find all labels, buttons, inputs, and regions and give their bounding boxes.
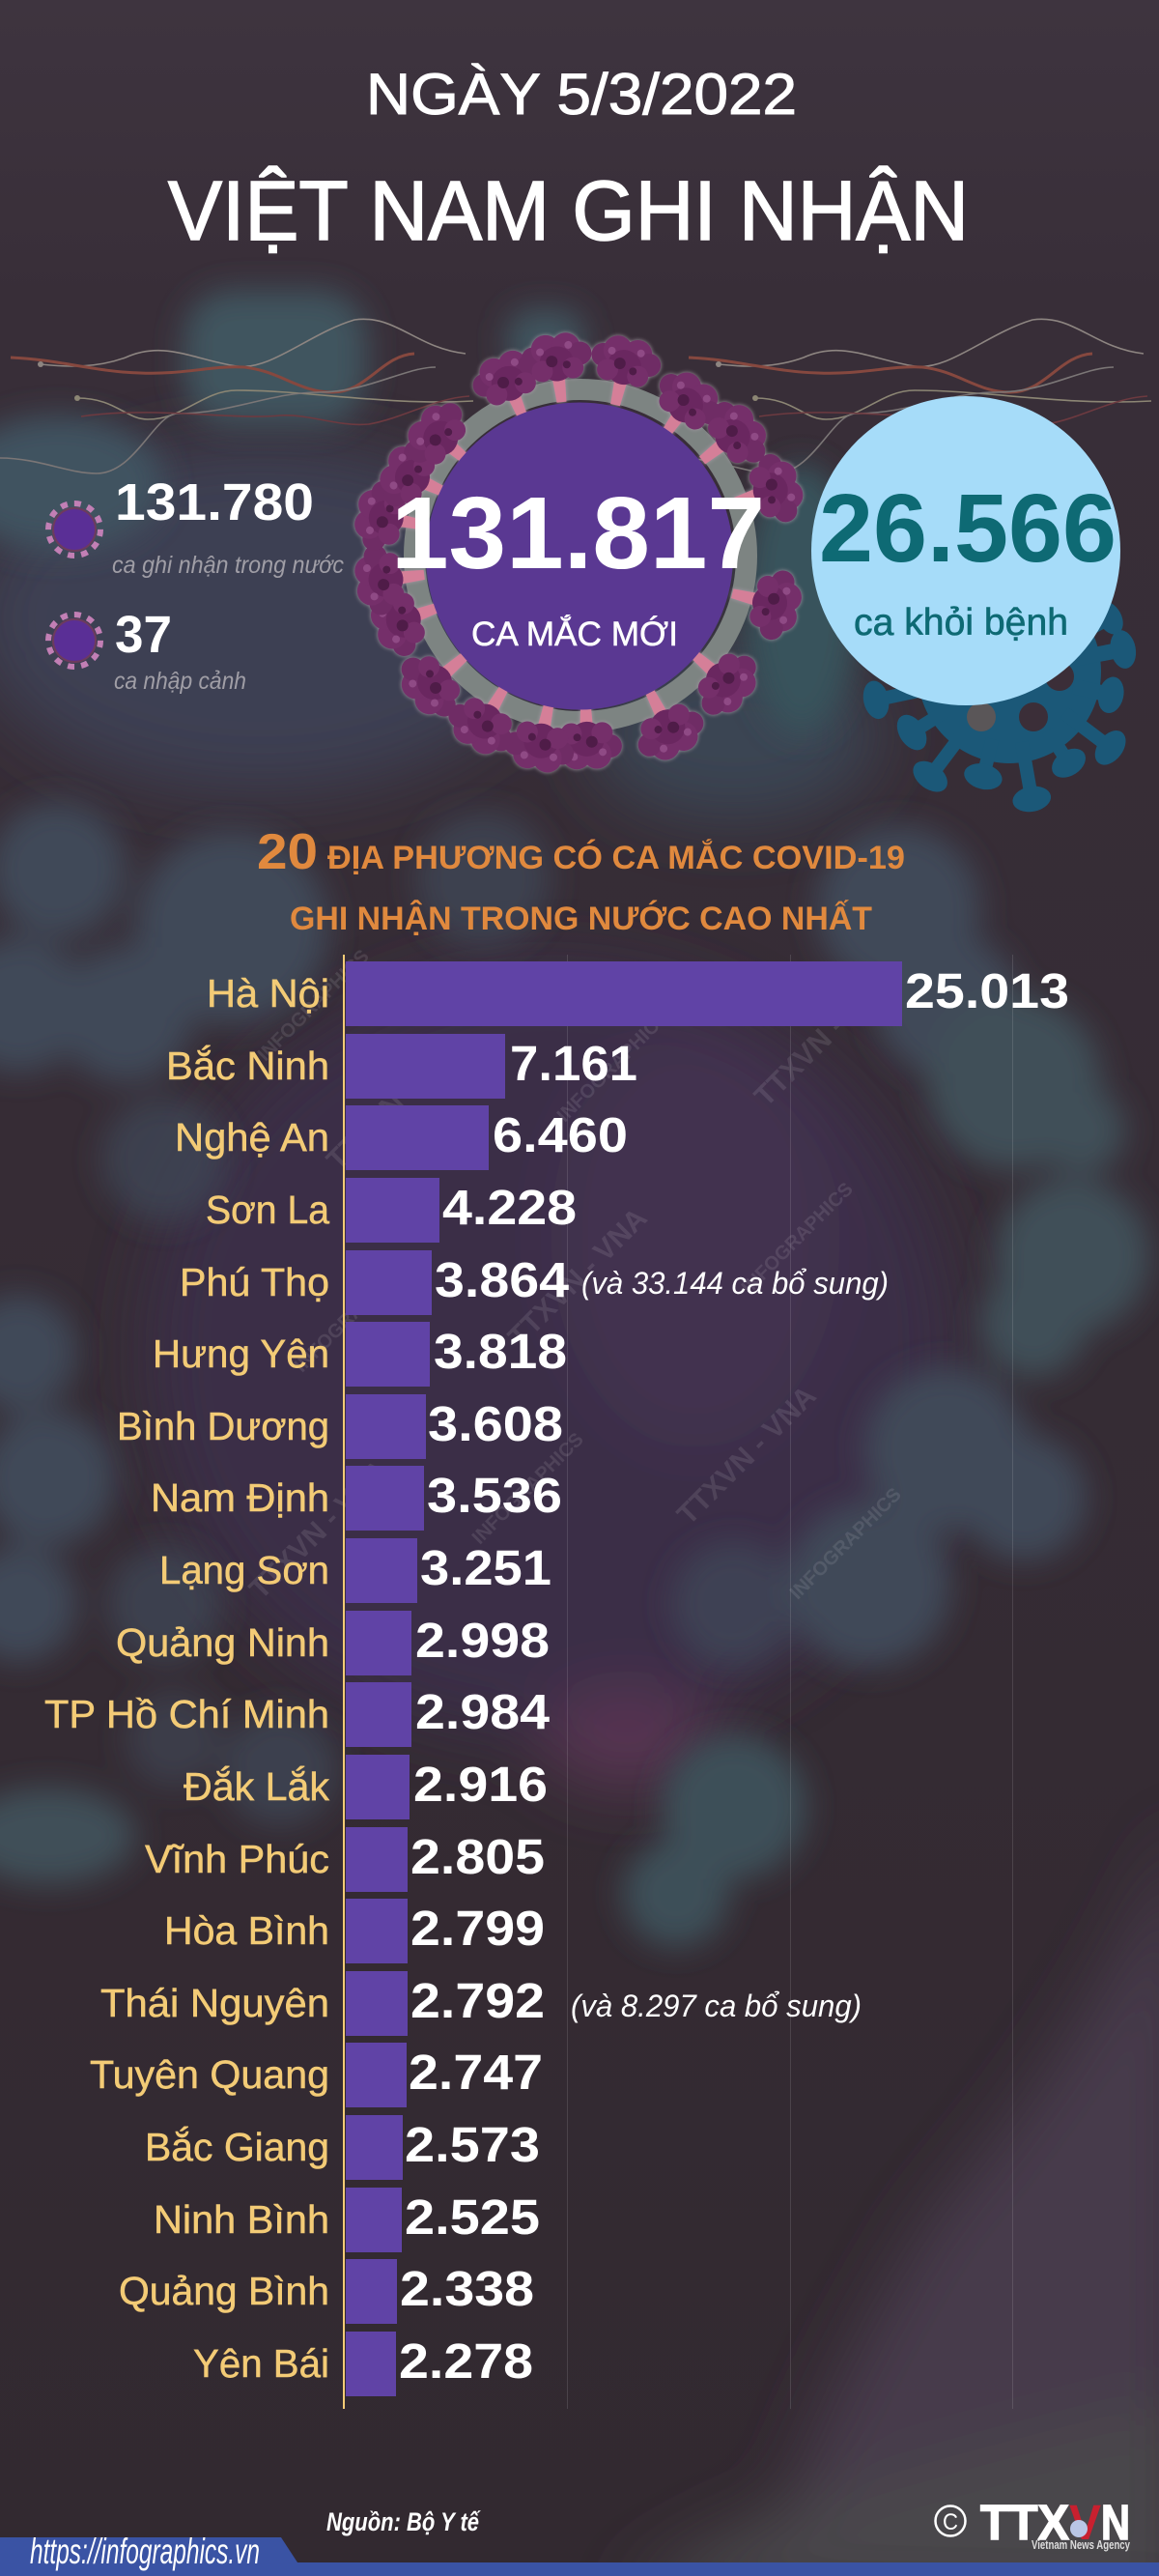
- row: Hòa Bình: [164, 1899, 545, 1963]
- row: Sơn La: Sơn La: [206, 1188, 329, 1232]
- row: Ninh Bình: Ninh Bình: [154, 2197, 329, 2242]
- row: TP Hồ Chí Minh: TP Hồ Chí Minh: [44, 1692, 329, 1736]
- row: Hà Nội: [207, 961, 1069, 1026]
- chart heading: 20: [257, 824, 318, 880]
- row: Sơn La: 4.228: [442, 1180, 577, 1235]
- row: Quảng Ninh: Quảng Ninh: [116, 1620, 329, 1665]
- imported number: 37: [115, 606, 172, 664]
- copyright mark: [935, 2506, 966, 2535]
- row: Nam Định: Nam Định: [151, 1475, 329, 1520]
- watermarks: TTXVN - VNA: [321, 1025, 472, 1177]
- row: Đắk Lắk: Đắk Lắk: [184, 1764, 329, 1809]
- row: Hưng Yên: [153, 1322, 567, 1387]
- row: Quảng Ninh: [116, 1611, 550, 1675]
- watermarks: [243, 946, 906, 1606]
- row: Hòa Bình: Hòa Bình: [164, 1908, 329, 1953]
- row: Yên Bái: 2.278: [399, 2333, 533, 2389]
- row: Ninh Bình: [154, 2188, 540, 2252]
- watermarks: INFOGRAPHICS: [468, 1429, 588, 1549]
- row: Bình Dương: [117, 1394, 563, 1459]
- row: Bắc Ninh: Bắc Ninh: [166, 1044, 329, 1088]
- title: main: VIỆT NAM GHI NHẬN: [168, 164, 969, 258]
- row: Hà Nội: 25.013: [905, 963, 1069, 1018]
- source note: Nguồn: Bộ Y tế: [326, 2507, 481, 2536]
- domestic number: 131.780: [115, 473, 314, 531]
- row: Lạng Sơn: 3.251: [420, 1540, 551, 1595]
- watermarks: TTXVN - VNA: [671, 1380, 823, 1531]
- row: Quảng Bình: Quảng Bình: [119, 2269, 329, 2313]
- row: Quảng Bình: 2.338: [400, 2261, 534, 2316]
- chart heading: GHI NHẬN TRONG NƯỚC CAO NHẤT: [290, 901, 872, 937]
- recovered number: 26.566: [819, 474, 1117, 583]
- row: Nghệ An: 6.460: [493, 1107, 628, 1162]
- row: Bình Dương: 3.608: [428, 1396, 563, 1451]
- panel: recovered circle: [811, 396, 1120, 705]
- row: Quảng Ninh: 2.998: [415, 1613, 550, 1668]
- watermarks: TTXVN - VNA: [749, 961, 900, 1113]
- imported label: ca nhập cảnh: [114, 668, 246, 695]
- row: Tuyên Quang: 2.747: [409, 2045, 543, 2100]
- chart heading: [257, 824, 905, 937]
- url: https://infographics.vn: [30, 2532, 260, 2571]
- row: Lạng Sơn: Lạng Sơn: [159, 1548, 329, 1592]
- row: Hòa Bình: 2.799: [410, 1901, 545, 1956]
- icon: small virus domestic: [48, 503, 100, 556]
- icon: blue virus behind recovered circle: [860, 580, 1139, 815]
- row: Bình Dương: Bình Dương: [117, 1404, 329, 1448]
- footer band with url: [0, 2532, 1159, 2576]
- row: Yên Bái: [193, 2332, 533, 2396]
- row: Vĩnh Phúc: 2.805: [410, 1829, 545, 1884]
- row: Thái Nguyên: 2.792: [410, 1973, 545, 2028]
- row: Nghệ An: [175, 1105, 628, 1170]
- row: Phú Thọ: (và 33.144 ca bổ sung): [581, 1266, 889, 1301]
- row: Tuyên Quang: [90, 2043, 543, 2107]
- row: Nghệ An: Nghệ An: [175, 1115, 329, 1159]
- row: Bắc Ninh: 7.161: [510, 1036, 637, 1091]
- row: Lạng Sơn: [159, 1538, 551, 1603]
- row: Bắc Ninh: [166, 1034, 637, 1099]
- row: Thái Nguyên: Thái Nguyên: [100, 1981, 329, 2025]
- row: Bắc Giang: Bắc Giang: [145, 2125, 329, 2169]
- row: Nam Định: [151, 1466, 562, 1531]
- watermarks: INFOGRAPHICS: [553, 1007, 673, 1127]
- row: Hưng Yên: Hưng Yên: [153, 1331, 329, 1376]
- wave lines left: [0, 319, 473, 473]
- row: Phú Thọ: 3.864: [435, 1252, 570, 1307]
- row: Thái Nguyên: [100, 1971, 862, 2036]
- new cases number: 131.817: [391, 476, 765, 590]
- panel: domestic cases: [48, 473, 344, 579]
- row: Vĩnh Phúc: Vĩnh Phúc: [145, 1837, 329, 1881]
- watermarks: INFOGRAPHICS: [254, 946, 374, 1066]
- row: Quảng Bình: [119, 2259, 534, 2324]
- watermarks: INFOGRAPHICS: [291, 1257, 410, 1377]
- row: Hà Nội: Hà Nội: [207, 971, 329, 1016]
- row: Phú Thọ: [180, 1250, 889, 1315]
- logo: TTXVN: TTX: [980, 2495, 1069, 2550]
- new cases label: CA MẮC MỚI: [471, 615, 678, 653]
- row: Bắc Giang: 2.573: [405, 2117, 540, 2172]
- row: Thái Nguyên: (và 8.297 ca bổ sung): [571, 1989, 862, 2023]
- chart heading: ĐỊA PHƯƠNG CÓ CA MẮC COVID-19: [327, 840, 905, 876]
- copyright mark: C: [943, 2509, 958, 2535]
- icon: large coronavirus: [350, 329, 810, 778]
- panel: imported cases: [48, 606, 246, 695]
- watermarks: INFOGRAPHICS: [738, 1179, 858, 1299]
- row: TP Hồ Chí Minh: 2.984: [415, 1684, 551, 1739]
- bar chart: [44, 955, 1069, 2409]
- row: Sơn La: [206, 1178, 577, 1243]
- row: Yên Bái: Yên Bái: [193, 2341, 329, 2386]
- row: Ninh Bình: 2.525: [405, 2190, 540, 2245]
- panel: new cases circle: [391, 402, 765, 709]
- row: Vĩnh Phúc: [145, 1827, 545, 1892]
- recovered label: ca khỏi bệnh: [854, 602, 1068, 644]
- watermarks: INFOGRAPHICS: [786, 1484, 906, 1604]
- row: Đắk Lắk: [184, 1755, 548, 1819]
- row: Phú Thọ: Phú Thọ: [180, 1260, 329, 1304]
- logo: TTXVN: V: [1069, 2495, 1101, 2550]
- watermarks: TTXVN - VNA: [243, 1454, 395, 1606]
- row: TP Hồ Chí Minh: [44, 1682, 551, 1747]
- logo: TTXVN: N: [1101, 2495, 1130, 2550]
- row: Hưng Yên: 3.818: [434, 1324, 567, 1379]
- row: Tuyên Quang: Tuyên Quang: [90, 2052, 329, 2097]
- row: Đắk Lắk: 2.916: [413, 1757, 548, 1812]
- title: date: NGÀY 5/3/2022: [366, 62, 797, 127]
- domestic label: ca ghi nhận trong nước: [112, 552, 344, 579]
- wave lines right: [678, 319, 1151, 473]
- logo: TTXVN: [935, 2495, 1131, 2552]
- row: Bắc Giang: [145, 2115, 540, 2180]
- icon: small virus imported: [48, 615, 100, 667]
- watermarks: TTXVN - VNA: [502, 1202, 654, 1354]
- row: Nam Định: 3.536: [427, 1468, 562, 1523]
